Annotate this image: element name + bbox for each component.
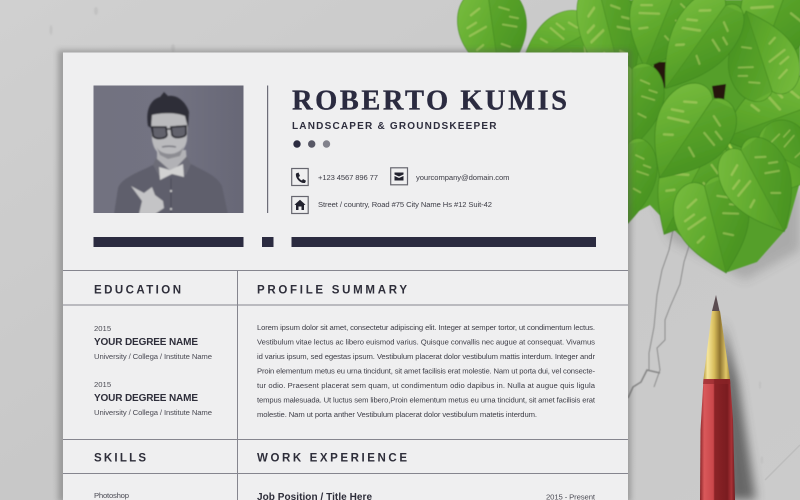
plant foliage mass [628,0,800,272]
stem [724,137,737,157]
name heading: ROBERTO KUMIS [292,86,567,116]
paper shadow [58,50,631,500]
skill label: Photoshop [94,491,129,500]
profile summary text [257,323,596,419]
profile summary text: id varius ipsum, sed egestas ipsum. Vestibulum placerat dolor vestibulum mattis interdum. Integer andr [257,352,595,361]
pen [700,295,735,500]
hair [147,92,189,128]
hand [131,186,164,214]
resume sheet [63,52,628,500]
email address: yourcompany@domain.com [416,173,510,182]
collar [154,156,190,174]
pen gold nose [704,311,730,379]
profile summary text: tur odio. Praesent placerat sem quam, ut condimentum odio dapibus in. Nulla at augue quis ligula [257,381,596,390]
street address: Street / country, Road #75 City Name Hs #12 Suit-42 [318,200,492,209]
profile summary text: Lorem ipsum dolor sit amet, consectetur adipiscing elit. Integer at semper tortor, ut condimentum lectus. [257,323,595,332]
soil [652,62,726,100]
education entry 2 [94,380,212,417]
plant [453,0,800,283]
job title: LANDSCAPER & GROUNDSKEEPER [292,121,497,132]
mouth [162,145,176,148]
leaves [453,0,800,283]
neck [157,150,187,172]
pen shadow [722,320,756,500]
header divider [267,86,268,213]
profile summary text: Vestibulum vitae lectus ac libero euismod varius. Quisque convallis nec augue at consequat. Vivamus [257,338,595,346]
education entries [94,324,212,417]
section grid lines [63,270,628,500]
glasses [152,126,186,139]
icon: phone [292,168,308,186]
education entry 1: University / Collega / Institute Name [94,352,212,361]
education entry 2: University / Collega / Institute Name [94,408,212,417]
education entry 1: YOUR DEGREE NAME [94,337,198,348]
profile summary text: Proin elementum metus eu urna tincidunt, sit amet facilisis erat molestie. Nam ut porta dui, vel consecte- [257,366,595,376]
profile summary text: tempus malesuada. Ut luctus sem libero,Proin elementum metus eu urna tincidunt, sit amet facilisis erat [257,396,596,404]
icon: envelope [391,168,408,185]
shirt [114,162,228,214]
heading: skills: SKILLS [94,452,146,464]
portrait photo [94,86,244,214]
pen tip [712,295,720,311]
heading: profile summary: PROFILE SUMMARY [257,285,407,297]
plant shadow [640,160,800,280]
three dots [293,140,330,148]
profile summary text: molestie. Nam ut porta anther Vestibulum placerat dolor vestibulum matetis interdum. [257,410,537,419]
heading: work experience: WORK EXPERIENCE [257,452,407,464]
education entry 1: 2015 [94,324,111,333]
phone number: +123 4567 896 77 [318,173,378,182]
heading: education: EDUCATION [94,285,181,297]
bow tie [159,164,184,180]
education entry 2: YOUR DEGREE NAME [94,393,198,404]
education entry 2: 2015 [94,380,111,389]
wall cracks [628,230,690,398]
icon: home [292,196,308,214]
face [150,112,188,152]
header bars [94,237,596,247]
pen red barrel [700,379,735,500]
education entry 1 [94,324,212,361]
